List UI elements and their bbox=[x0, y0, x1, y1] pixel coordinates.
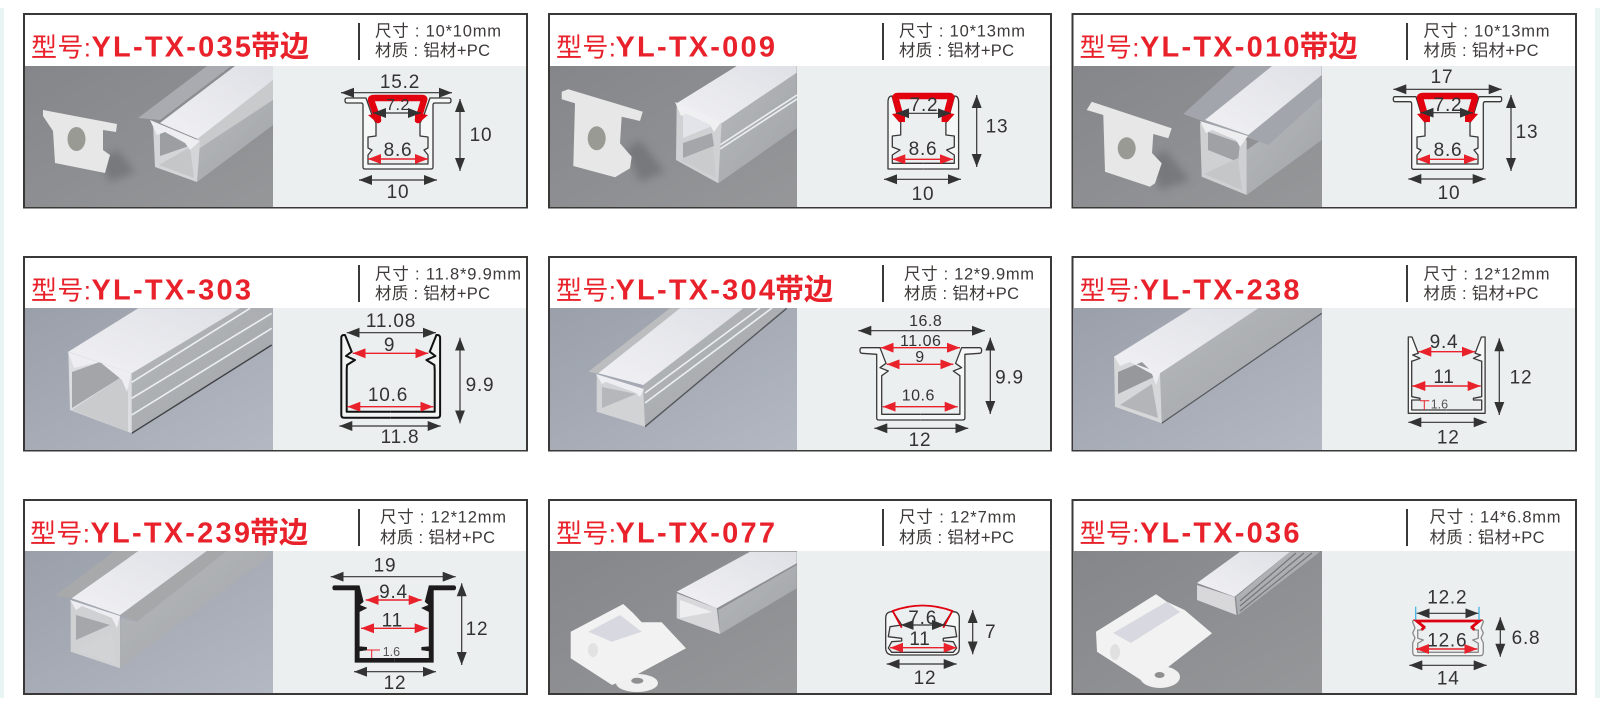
model title: YL-TX-035 bbox=[92, 32, 251, 64]
dimension diagram: 9 bbox=[384, 335, 395, 356]
model title: 带边 bbox=[1300, 30, 1358, 64]
dimension diagram: 17 bbox=[1431, 67, 1453, 88]
dimension diagram: 9.9 bbox=[995, 367, 1024, 388]
dimension diagram: 9.4 bbox=[379, 582, 408, 603]
dimension diagram: 9 bbox=[915, 349, 925, 366]
profile cross-section bbox=[860, 348, 982, 420]
profile cross-section bbox=[886, 612, 959, 655]
specification text bbox=[1407, 264, 1550, 303]
specification text: 尺寸 : 14*6.8mm bbox=[1430, 508, 1560, 526]
red diffuser bbox=[368, 98, 428, 122]
panel: YL-TX-077 bbox=[549, 500, 1051, 694]
profile cross-section bbox=[888, 96, 959, 169]
product photo bbox=[25, 551, 273, 693]
dimension diagram: 9.9 bbox=[466, 375, 494, 396]
specification text bbox=[1407, 508, 1560, 547]
dimension diagram bbox=[331, 556, 488, 694]
product photo bbox=[550, 551, 797, 693]
dimension diagram bbox=[858, 313, 1024, 451]
thickness mark: 1.6 bbox=[1431, 397, 1448, 411]
model title: YL-TX-077 bbox=[616, 518, 775, 550]
dimension diagram: 12 bbox=[1437, 428, 1460, 448]
specification text: 材质 : 铝材+PC bbox=[904, 284, 1019, 303]
dimension diagram: 11 bbox=[909, 629, 931, 650]
red diffuser bbox=[892, 96, 955, 122]
dimension diagram: 10 bbox=[912, 184, 934, 205]
model title bbox=[1080, 30, 1358, 64]
model title: YL-TX-010 bbox=[1140, 32, 1300, 64]
specification text bbox=[359, 508, 506, 547]
dimension diagram: 11.8 bbox=[381, 427, 419, 448]
dimension diagram: 6.8 bbox=[1512, 628, 1540, 649]
dimension diagram: 13 bbox=[986, 117, 1008, 138]
model title: 型号: bbox=[30, 518, 90, 548]
dimension diagram bbox=[1409, 588, 1540, 690]
dimension diagram: 11 bbox=[382, 610, 403, 632]
dimension diagram: 7.2 bbox=[910, 95, 938, 116]
blue guide lines bbox=[1416, 607, 1479, 620]
dimension diagram bbox=[1393, 67, 1538, 204]
model title: 型号: bbox=[1080, 518, 1140, 548]
panel: YL-TX-304 bbox=[549, 257, 1051, 451]
dimension diagram bbox=[1408, 332, 1532, 448]
product photo bbox=[550, 65, 797, 207]
product photo bbox=[25, 66, 273, 207]
specification text bbox=[883, 264, 1034, 303]
model title bbox=[556, 274, 833, 306]
dimension diagram: 11.08 bbox=[366, 311, 416, 332]
panel: YL-TX-303 bbox=[24, 257, 527, 450]
red diffuser bbox=[1417, 621, 1479, 630]
specification text bbox=[883, 508, 1016, 547]
model title: 带边 bbox=[775, 274, 833, 306]
specification text bbox=[359, 22, 501, 60]
model title: YL-TX-036 bbox=[1140, 518, 1300, 550]
model title: 型号: bbox=[556, 518, 616, 548]
profile cross-section bbox=[1393, 97, 1502, 169]
model title: YL-TX-239 bbox=[90, 518, 250, 550]
dimension diagram: 10 bbox=[1438, 183, 1460, 204]
dimension diagram: 15.2 bbox=[380, 72, 420, 93]
model title: 型号: bbox=[31, 276, 91, 306]
dimension diagram: 11.06 bbox=[900, 333, 941, 350]
profile cross-section bbox=[1413, 620, 1483, 656]
model title: 型号: bbox=[556, 32, 616, 62]
specification text: 尺寸 : 11.8*9.9mm bbox=[375, 264, 521, 284]
dimension diagram: 7.2 bbox=[386, 97, 410, 114]
specification text: 材质 : 铝材+PC bbox=[375, 41, 490, 60]
model title: 带边 bbox=[251, 30, 309, 64]
model title: 型号: bbox=[1080, 32, 1140, 62]
specification text bbox=[1407, 22, 1550, 60]
model title: 型号: bbox=[1080, 276, 1140, 306]
dimension diagram bbox=[884, 95, 1008, 205]
product photo bbox=[1073, 65, 1322, 207]
model title bbox=[31, 30, 309, 64]
product photo bbox=[1073, 551, 1322, 693]
model title: YL-TX-303 bbox=[92, 274, 251, 306]
model title: YL-TX-304 bbox=[616, 274, 775, 306]
dimension diagram bbox=[341, 72, 492, 203]
dimension diagram: 12 bbox=[914, 668, 936, 689]
panel: YL-TX-239 bbox=[24, 500, 527, 694]
model title bbox=[30, 516, 308, 550]
dimension diagram: 10 bbox=[470, 125, 492, 146]
specification text: 材质 : 铝材+PC bbox=[1430, 528, 1545, 547]
specification text bbox=[883, 22, 1025, 60]
specification text: 材质 : 铝材+PC bbox=[899, 528, 1014, 547]
dimension diagram: 16.8 bbox=[909, 313, 942, 330]
dimension diagram: 14 bbox=[1437, 668, 1460, 690]
model title: 带边 bbox=[250, 516, 308, 550]
product photo bbox=[1073, 308, 1322, 450]
thickness mark: 1.6 bbox=[383, 645, 400, 659]
model title: 型号: bbox=[31, 32, 91, 62]
specification text: 材质 : 铝材+PC bbox=[1424, 41, 1539, 60]
dimension diagram: 8.6 bbox=[909, 139, 937, 160]
dimension diagram: 12 bbox=[909, 430, 931, 451]
profile cross-section bbox=[341, 335, 440, 418]
dimension diagram: 8.6 bbox=[384, 140, 412, 161]
specification text: 尺寸 : 12*9.9mm bbox=[904, 264, 1034, 284]
specification text: 尺寸 : 12*12mm bbox=[1424, 264, 1550, 284]
specification text: 材质 : 铝材+PC bbox=[899, 41, 1014, 60]
panel: YL-TX-238 bbox=[1072, 257, 1576, 450]
panel: YL-TX-009 bbox=[549, 14, 1051, 208]
model title: YL-TX-009 bbox=[616, 32, 775, 64]
specification text bbox=[359, 264, 521, 303]
dimension diagram: 12 bbox=[384, 673, 406, 694]
specification text: 尺寸 : 10*10mm bbox=[375, 22, 501, 40]
thickness mark bbox=[367, 645, 400, 659]
specification text: 尺寸 : 12*7mm bbox=[899, 508, 1016, 526]
specification text: 材质 : 铝材+PC bbox=[375, 284, 490, 303]
dimension diagram: 12.2 bbox=[1427, 588, 1467, 608]
specification text: 材质 : 铝材+PC bbox=[1424, 284, 1539, 303]
specification text: 材质 : 铝材+PC bbox=[380, 528, 495, 547]
dimension diagram: 8.6 bbox=[1434, 140, 1462, 161]
profile cross-section bbox=[333, 586, 456, 662]
dimension diagram: 12 bbox=[1510, 367, 1532, 388]
specification text: 尺寸 : 10*13mm bbox=[899, 22, 1025, 40]
dimension diagram: 9.4 bbox=[1430, 332, 1458, 353]
model title: 型号: bbox=[556, 276, 616, 306]
model title: YL-TX-238 bbox=[1140, 274, 1300, 306]
dimension diagram: 7 bbox=[985, 622, 996, 643]
red diffuser bbox=[1417, 96, 1478, 122]
dimension diagram: 11 bbox=[1433, 367, 1455, 388]
dimension diagram: 10.6 bbox=[902, 387, 935, 404]
specification text: 尺寸 : 10*13mm bbox=[1424, 22, 1550, 40]
dimension diagram: 13 bbox=[1516, 122, 1538, 143]
red diffuser bbox=[893, 606, 952, 628]
dimension diagram: 12 bbox=[466, 619, 488, 640]
dimension diagram: 10 bbox=[387, 182, 409, 203]
specification text: 尺寸 : 12*12mm bbox=[380, 508, 506, 526]
profile cross-section bbox=[345, 98, 451, 169]
dimension diagram: 7.6 bbox=[908, 608, 937, 629]
dimension diagram: 12.6 bbox=[1427, 630, 1467, 652]
dimension diagram: 7.2 bbox=[1434, 95, 1462, 116]
profile cross-section bbox=[1408, 337, 1485, 413]
panel: YL-TX-035 bbox=[24, 14, 527, 208]
dimension diagram bbox=[886, 606, 996, 689]
product photo bbox=[25, 308, 273, 450]
dimension diagram: 10.6 bbox=[368, 385, 408, 406]
product photo bbox=[550, 308, 797, 450]
panel: YL-TX-036 bbox=[1072, 500, 1576, 694]
dimension diagram bbox=[339, 311, 494, 448]
panel: YL-TX-010 bbox=[1072, 14, 1576, 208]
dimension diagram: 19 bbox=[374, 556, 396, 576]
